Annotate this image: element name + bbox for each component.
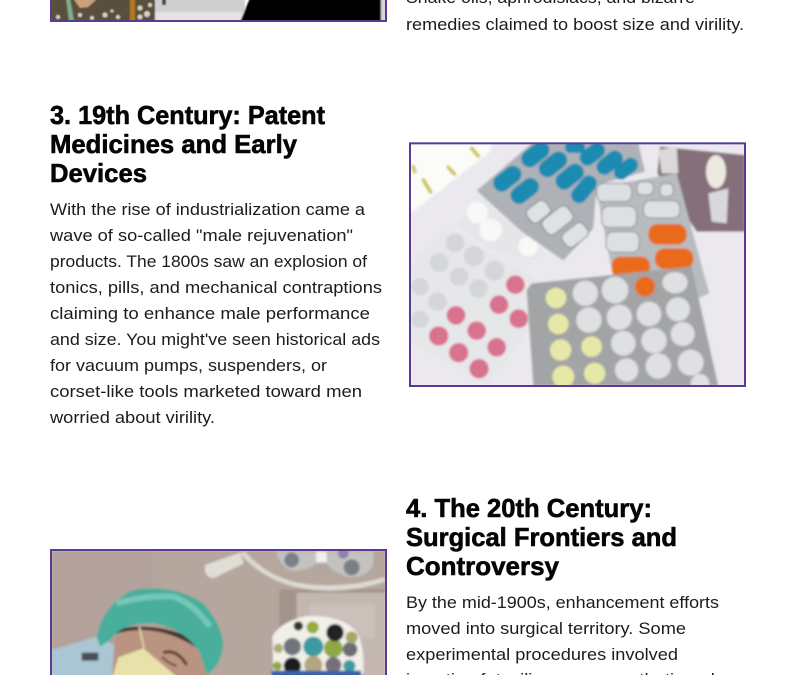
mauve card bbox=[657, 147, 745, 232]
heading: section 3: Medicines and Early bbox=[50, 129, 298, 159]
text: section 3 body: claiming to enhance male performance bbox=[50, 305, 370, 323]
surgical mask bbox=[110, 648, 177, 675]
text: section 4 body: experimental procedures involved bbox=[406, 646, 678, 664]
heading: section 4: 4. The 20th Century: bbox=[406, 493, 652, 523]
text: section 4 body: By the mid-1900s, enhancement efforts bbox=[406, 594, 719, 612]
surgical lamp bbox=[240, 552, 385, 591]
heading: section 3: 3. 19th Century: Patent bbox=[50, 100, 325, 130]
text: section 3 body: and size. You might've seen historical ads bbox=[50, 331, 380, 349]
white tablet blister bbox=[457, 197, 543, 261]
yellow tablet front blister bbox=[527, 267, 718, 386]
heading: section 4: Surgical Frontiers and bbox=[406, 522, 677, 552]
text: section 4 body: moved into surgical territory. Some bbox=[406, 620, 686, 638]
text: section 3 body: worried about virility. bbox=[49, 409, 215, 427]
text: section 3 body bbox=[49, 201, 382, 427]
text: section 2 closing lines bbox=[406, 0, 744, 34]
image: surgeon in operating room bbox=[51, 548, 386, 675]
heading: section 3 bbox=[50, 100, 325, 188]
pink tablet blister bbox=[410, 229, 535, 384]
text: section 3 body: With the rise of industrialization came a bbox=[50, 201, 366, 219]
text: section 3 body: tonics, pills, and mechanical contraptions bbox=[50, 279, 382, 297]
text: section 3 body: wave of so-called "male rejuvenation" bbox=[49, 227, 353, 245]
wall recess bbox=[279, 589, 385, 626]
text: section 3 body: for vacuum pumps, suspenders, or bbox=[50, 357, 328, 375]
heading: section 4: Controversy bbox=[406, 551, 560, 581]
text: section 4 body bbox=[406, 594, 724, 675]
blue capsule blister bbox=[477, 143, 645, 261]
text: section 3 body: corset-like tools marketed toward men bbox=[50, 383, 362, 401]
orange capsule blister bbox=[596, 173, 709, 300]
heading: section 4 bbox=[406, 493, 677, 581]
image: blister packs of pills bbox=[410, 138, 745, 393]
surgical gown bbox=[51, 637, 118, 675]
text: section 2 closing lines: remedies claimed to boost size and virility. bbox=[406, 16, 744, 34]
image: section 2 photo fragment bbox=[51, 0, 386, 22]
surgeon face bbox=[112, 627, 210, 675]
text: section 3 body: products. The 1800s saw an explosion of bbox=[50, 253, 367, 271]
patterned cap on mannequin bbox=[272, 616, 364, 673]
white pill card bbox=[410, 143, 492, 213]
green surgical cap bbox=[97, 588, 223, 675]
heading: section 3: Devices bbox=[50, 158, 147, 188]
